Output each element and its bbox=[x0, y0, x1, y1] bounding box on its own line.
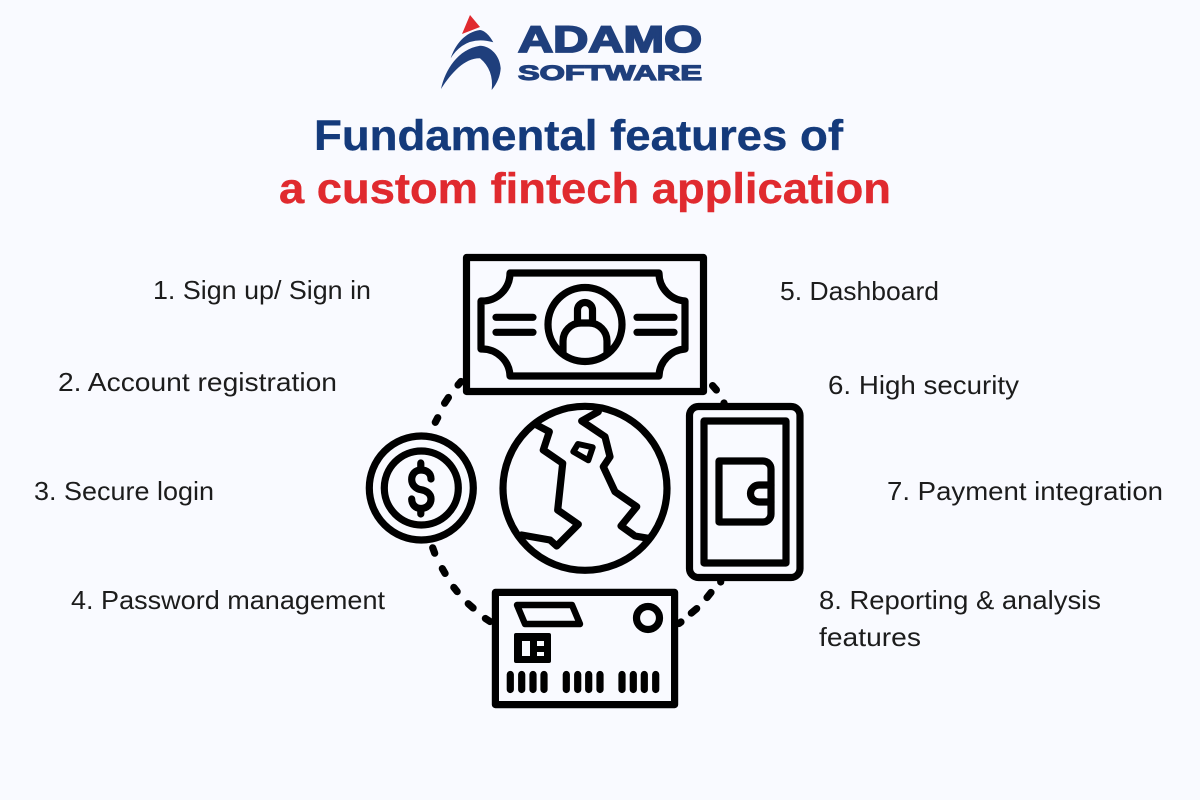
feature list: right column: features bbox=[819, 622, 921, 652]
logo wordmark bbox=[518, 19, 702, 85]
title bbox=[279, 112, 891, 213]
logo wordmark: ADAMO bbox=[518, 19, 702, 60]
title: Fundamental features of bbox=[314, 112, 844, 160]
feature list: right column: 5. Dashboard bbox=[780, 276, 939, 306]
logo wordmark: SOFTWARE bbox=[518, 62, 702, 85]
feature list: left column: 3. Secure login bbox=[34, 476, 214, 506]
card chip bbox=[514, 633, 551, 663]
icon: bank card bbox=[495, 592, 675, 705]
title: a custom fintech application bbox=[279, 165, 891, 213]
icon: banknote with person bbox=[466, 258, 704, 392]
icon: wallet on tablet bbox=[690, 406, 800, 578]
feature list: right column: 8. Reporting & analysis bbox=[819, 585, 1101, 615]
logo: Adamo Software bbox=[441, 15, 702, 90]
feature list: right column: 6. High security bbox=[828, 370, 1019, 400]
feature list: left column: 1. Sign up/ Sign in bbox=[153, 275, 371, 305]
feature list: left column bbox=[34, 275, 386, 615]
card number bbox=[510, 674, 656, 690]
icon: globe bbox=[503, 406, 667, 570]
icon: logo mark bbox=[441, 15, 501, 90]
feature list: left column: 2. Account registration bbox=[58, 367, 337, 397]
feature list: right column bbox=[780, 276, 1163, 652]
feature list: right column: 7. Payment integration bbox=[887, 476, 1163, 506]
feature list: left column: 4. Password management bbox=[71, 585, 386, 615]
dashed connector ring bbox=[433, 382, 724, 624]
icon: coin with dollar sign bbox=[369, 436, 473, 540]
